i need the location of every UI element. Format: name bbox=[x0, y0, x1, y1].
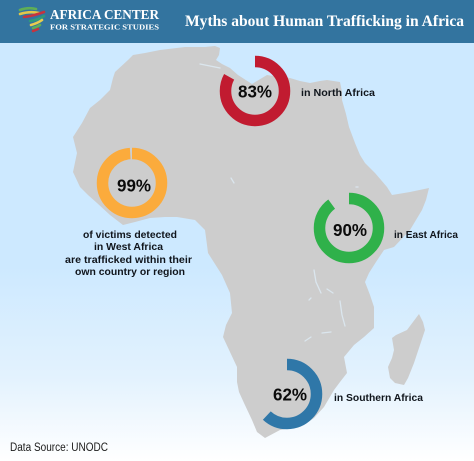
lakes bbox=[200, 64, 358, 341]
logo text: FOR STRATEGIC STUDIES bbox=[50, 22, 159, 32]
logo icon bbox=[20, 8, 44, 31]
logo text bbox=[50, 7, 159, 32]
Madagascar bbox=[388, 314, 425, 385]
donut: North Africa 83%: 83% bbox=[238, 82, 272, 102]
donut: West Africa 99%: 99% bbox=[117, 176, 151, 196]
donut: North Africa 83% bbox=[226, 62, 284, 120]
text: West Africa description: are trafficked within their bbox=[65, 254, 192, 266]
mainland Africa bbox=[73, 46, 429, 438]
label: Southern Africa: in Southern Africa bbox=[334, 392, 423, 404]
text: West Africa description: in West Africa bbox=[94, 241, 163, 253]
donut: East Africa 90%: 90% bbox=[333, 220, 367, 240]
map of Africa bbox=[73, 46, 429, 438]
data source: Data Source: UNODC bbox=[10, 442, 108, 454]
title: Myths about Human Trafficking in Africa bbox=[185, 13, 464, 30]
header bar bbox=[0, 0, 474, 43]
text: West Africa description: of victims detected bbox=[83, 229, 177, 241]
donut: Southern Africa 62%: 62% bbox=[273, 384, 307, 404]
label: North Africa: in North Africa bbox=[301, 87, 375, 99]
text: West Africa description bbox=[65, 229, 192, 278]
label: East Africa: in East Africa bbox=[394, 229, 458, 241]
donut: Southern Africa 62% bbox=[258, 364, 316, 424]
donut: East Africa 90% bbox=[320, 198, 378, 258]
donut: West Africa 99% bbox=[102, 154, 162, 212]
text: West Africa description: own country or region bbox=[75, 266, 185, 278]
logo text: AFRICA CENTER bbox=[50, 7, 159, 22]
